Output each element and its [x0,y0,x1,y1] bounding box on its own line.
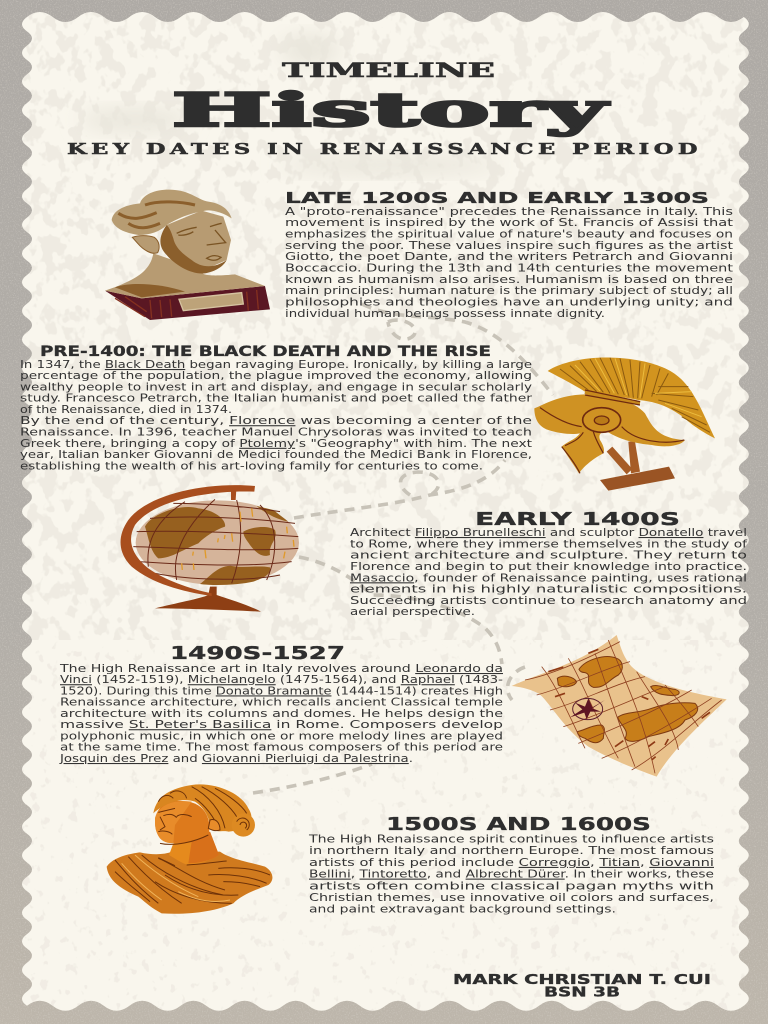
body text: architecture with its columns and domes. He helps design the [60,707,503,720]
title block [67,58,702,158]
icon: orange bust [107,784,272,914]
author credit: MARK CHRISTIAN T. CUI [453,972,711,988]
icon: golden roman helmet [534,358,715,491]
body text: individual human beings possess innate dignity. [285,307,605,320]
grid lines [525,640,722,773]
face [167,211,231,269]
shoulders and neck [115,253,237,297]
plinth [105,286,270,320]
shell [534,394,685,473]
drape [107,852,272,914]
sphere [136,500,299,585]
heading: EARLY 1400S [475,509,680,530]
body text: Giotto, the poet Dante, and the writers Petrarch and Giovanni [285,250,733,263]
icon: parchment map [512,635,727,777]
hair [112,190,232,235]
body text: known as humanism also arises. Humanism is based on three [285,273,733,286]
heading: 1500S AND 1600S [386,814,651,835]
subtitle: KEY DATES IN RENAISSANCE PERIOD [67,140,702,158]
body text: year, Italian banker Giovanni de Medici founded the Medici Bank in Florence, [20,448,532,461]
author credit: BSN 3B [544,984,620,1000]
body text: study. Francesco Petrarch, the Italian humanist and poet called the father [20,392,533,405]
body text: Greek there, bringing a copy of Ptolemy 's "Geography" with him. The next [20,437,532,450]
body text: percentage of the population, the plague improved the economy, allowing [20,369,532,382]
body text: Josquin des Prez and Giovanni Pierluigi da Palestrina . [59,752,413,765]
body text: and paint extravagant background settings. [309,903,616,916]
continents [145,507,225,558]
body text: ancient architecture and sculpture. They return to [350,549,748,562]
body text: Renaissance. In 1396, teacher Manuel Chrysoloras was invited to teach [20,425,532,438]
face [155,801,209,843]
plaque [179,293,243,311]
sheet [512,635,727,777]
body text [59,662,503,765]
body text: aerial perspective. [350,605,475,618]
body text: Boccaccio. During the 13th and 14th centuries the movement [285,262,733,274]
land masses [557,657,698,743]
body text: main principles: human nature is the primary subject of study; all [285,284,733,297]
heading: 1490S-1527 [170,644,345,664]
crest [548,358,715,438]
body text: Christian themes, use innovative oil colors and surfaces, [309,891,714,904]
grid lines [133,499,298,583]
body text [20,358,533,472]
hair [153,784,252,832]
body text: The High Renaissance art in Italy revolves around Leonardo da [59,662,503,675]
title: history: History [172,83,609,137]
section: late 1200s and early 1300s [285,189,733,320]
icon: tan bust on maroon plinth [105,190,270,320]
section: early 1400s [350,509,748,618]
body text: The High Renaissance spirit continues to influence artists [308,832,714,846]
body text: emphasizes the spiritual value of nature's beauty and focuses on [285,228,733,240]
body text: polyphonic music, in which one or more melody lines are played [60,729,503,742]
body text: to Rome, where they immerse themselves in the study of [350,537,747,550]
body text: In 1347, the Black Death began ravaging Europe. Ironically, by killing a large [20,358,532,371]
body text: elements in his highly naturalistic compositions. [350,583,747,596]
section: 1500s and 1600s [308,814,714,916]
compass rose [570,698,605,720]
author credit [453,972,711,1000]
body text: Vinci (1452-1519), Michelangelo (1475-1564), and Raphael (1483- [60,673,503,686]
body text: in northern Italy and northern Europe. The most famous [309,844,714,857]
section: pre-1400 black death [20,344,533,472]
base [155,587,261,612]
icon: globe on stand [121,485,299,612]
body text: wealthy people to invest in art and display, and engage in secular scholarly [20,380,533,393]
body text: Bellini , Tintoretto , and Albrecht Dürer . In their works, these [309,868,714,881]
ear [132,236,159,253]
heading: PRE-1400: THE BLACK DEATH AND THE RISE [40,344,491,360]
body text: Succeeding artists continue to research anatomy and [350,594,747,607]
body text: artists of this period include Correggio , Titian , Giovanni [309,856,714,869]
body text [285,205,733,320]
body text: Masaccio , founder of Renaissance painting, uses rational [350,571,747,584]
heading: LATE 1200S AND EARLY 1300S [285,189,709,207]
body text [308,832,714,916]
body text: By the end of the century, Florence was becoming a center of the [20,414,532,427]
body text [350,526,748,618]
body text: philosophies and theologies have an underlying unity; and [285,296,733,308]
dashed timeline route [253,304,553,793]
meridian arm [121,485,255,596]
body text: Florence and begin to put their knowledge into practice. [350,560,747,573]
body text: movement is inspired by the work of St. Francis of Assisi that [285,216,733,229]
body text: at the same time. The most famous composers of this period are [60,741,503,754]
body text: artists often combine classical pagan myths with [309,879,714,892]
section: 1490s-1527 [59,644,503,765]
stand [600,467,675,491]
body text: 1520). During this time Donato Bramante (1444-1514) creates High [60,684,503,697]
body text: massive St. Peter's Basilica in Rome. Composers develop [60,718,503,731]
body text: A "proto-renaissance" precedes the Renaissance in Italy. This [285,205,733,218]
body text: serving the poor. These values inspire such figures as the artist [285,239,733,252]
body text: of the Renaissance, died in 1374. [20,403,232,416]
title: timeline: TIMELINE [282,58,495,82]
body text: establishing the wealth of his art-loving family for centuries to come. [20,459,483,472]
body text: Renaissance architecture, which recalls ancient Classical temple [60,696,503,709]
neck [169,832,219,865]
body text: Architect Filippo Brunelleschi and sculptor Donatello travel [350,526,747,539]
